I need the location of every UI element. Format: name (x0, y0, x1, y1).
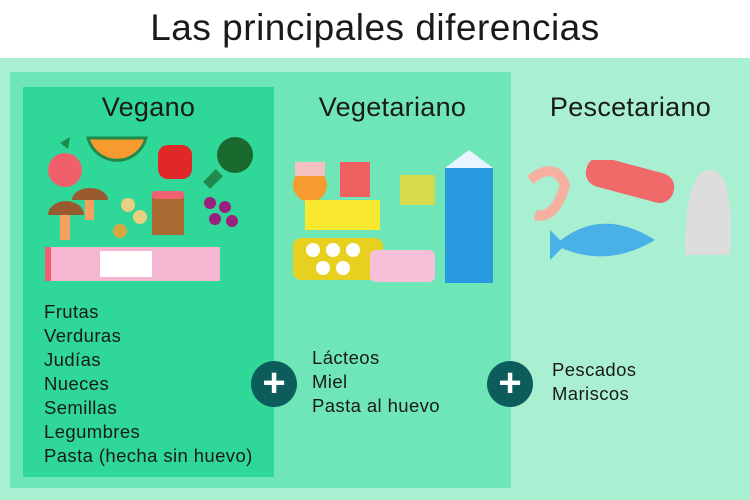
title: Las principales diferencias (150, 7, 600, 48)
text: pescetarian list: Pescados (552, 359, 636, 380)
icons: vegan foods (45, 136, 253, 281)
icon: plus 1: + (262, 361, 286, 405)
icon: plus 2 (487, 361, 533, 407)
icons: seafood (527, 160, 731, 260)
text: vegetarian list: Lácteos (312, 347, 380, 368)
text: vegan list: Legumbres (44, 421, 140, 442)
icon: plus 2: + (498, 361, 522, 405)
text: vegan list: Verduras (44, 325, 121, 346)
heading: pescetariano: Pescetariano (550, 92, 711, 122)
text: vegan list (44, 301, 253, 466)
panel: vegetarian (10, 72, 511, 488)
panel: vegan (23, 87, 274, 477)
text: vegan list: Pasta (hecha sin huevo) (44, 445, 253, 466)
text: pescetarian list (552, 359, 636, 404)
text: vegetarian list: Pasta al huevo (312, 395, 440, 416)
text: vegan list: Semillas (44, 397, 117, 418)
icons: vegetarian foods (293, 150, 493, 283)
text: vegetarian list (312, 347, 440, 416)
text: vegan list: Frutas (44, 301, 99, 322)
text: vegan list: Nueces (44, 373, 109, 394)
heading: vegetariano: Vegetariano (319, 92, 466, 122)
text: vegetarian list: Miel (312, 371, 348, 392)
icon: plus 1 (251, 361, 297, 407)
header bar (0, 0, 750, 58)
text: pescetarian list: Mariscos (552, 383, 629, 404)
text: vegan list: Judías (44, 349, 101, 370)
heading: vegano: Vegano (102, 92, 195, 122)
